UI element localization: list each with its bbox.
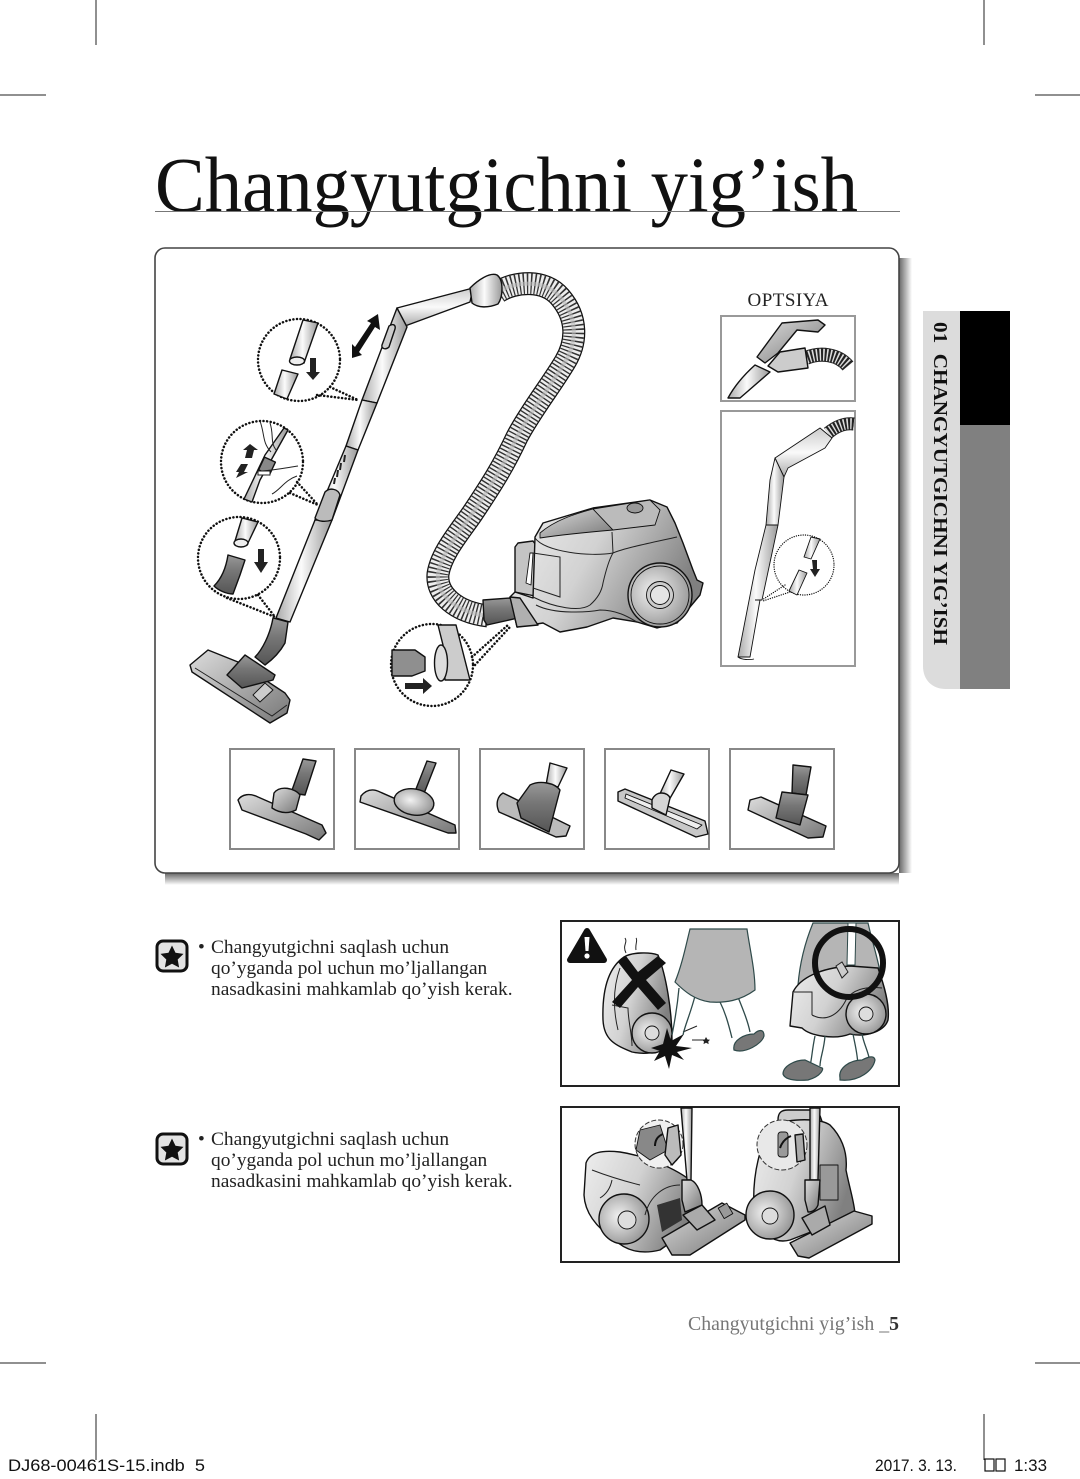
panel: floor tools [230, 749, 834, 849]
wand and handle [190, 274, 502, 723]
horizontal parking [584, 1108, 745, 1255]
note 1: • [198, 937, 205, 958]
page footer: Changyutgichni yig’ish _5 [688, 1313, 899, 1335]
label: optsiya: OPTSIYA [748, 290, 829, 311]
print slug right: 2017. 3. 13. [875, 1456, 957, 1475]
tool 1 [230, 749, 334, 849]
print slug left: DJ68-00461S-15.indb 5 [8, 1456, 205, 1475]
title: Changyutgichni yig’ish [155, 141, 858, 228]
note 1: Changyutgichni saqlash uchun [211, 937, 449, 958]
callout: tube joint [258, 319, 358, 401]
callout: hose connector [391, 624, 510, 706]
hose [438, 284, 574, 616]
panel: option telescopic wand [721, 411, 855, 666]
panel: assembly diagram [155, 248, 912, 885]
icon: star note [157, 1134, 187, 1164]
icon: approval circle [815, 929, 883, 997]
print slug right [875, 1456, 1047, 1475]
impact burst [651, 1028, 692, 1069]
tool 5 [730, 749, 834, 849]
tool 2 [355, 749, 459, 849]
panel: storage warning illustration [561, 921, 899, 1086]
section tab [923, 311, 1010, 689]
note 1: nasadkasini mahkamlab qo’yish kerak. [211, 979, 513, 1000]
note 2: nasadkasini mahkamlab qo’yish kerak. [211, 1171, 513, 1192]
panel: parking illustration [561, 1107, 899, 1262]
vacuum body [483, 500, 703, 632]
tool 4 [605, 749, 709, 849]
tool 3 [480, 749, 584, 849]
floor nozzle [190, 650, 290, 723]
tipped vacuum [603, 938, 672, 1053]
icon: double arrow [352, 314, 380, 358]
section tab: 01 CHANGYUTGICHNI YIG’ISH [929, 322, 951, 645]
panel: option handle [721, 316, 855, 401]
note 2: • [198, 1129, 205, 1150]
note 2: qo’yganda pol uchun mo’ljallangan [211, 1150, 488, 1171]
icon: warning triangle [570, 931, 604, 960]
vertical parking [746, 1108, 872, 1258]
callout: telescopic grip [221, 421, 318, 505]
person walking [672, 929, 764, 1051]
note 2 [157, 1129, 513, 1192]
note 1: qo’yganda pol uchun mo’ljallangan [211, 958, 488, 979]
right person carrying vacuum [783, 923, 888, 1080]
callout: nozzle joint [198, 517, 280, 617]
icon: cross [612, 956, 666, 1010]
note 2: Changyutgichni saqlash uchun [211, 1129, 449, 1150]
note 1 [157, 937, 513, 1000]
icon: star note [157, 941, 187, 971]
print slug right: 1:33 [1014, 1456, 1047, 1475]
